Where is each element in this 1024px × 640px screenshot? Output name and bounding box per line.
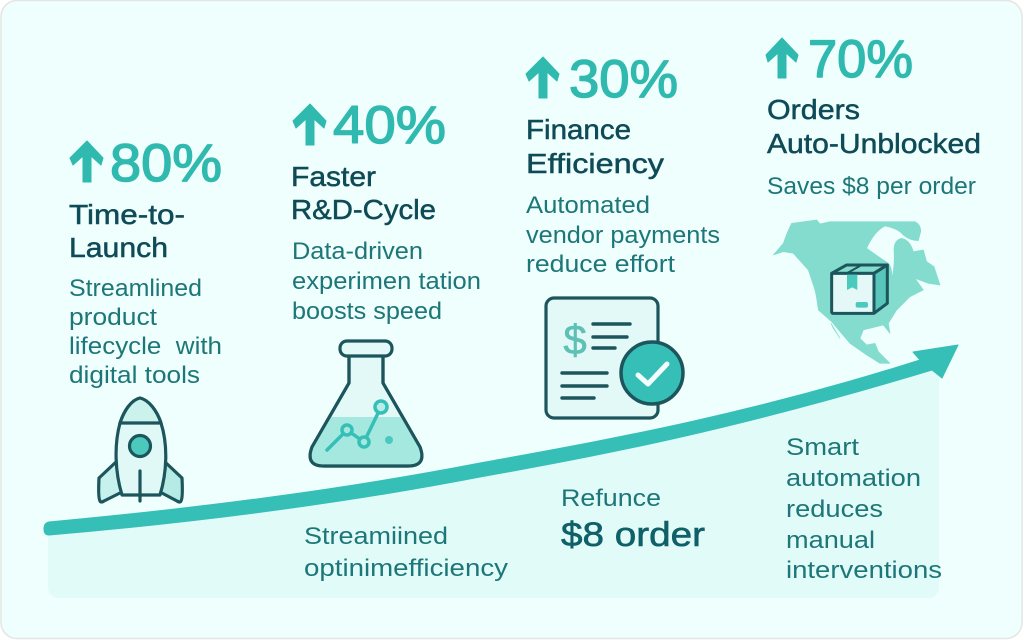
icon: up arrow bbox=[70, 141, 103, 182]
bottom note: refunce $8 order: $8 order bbox=[561, 516, 705, 554]
heading: faster R&D-cycle: Faster bbox=[291, 161, 376, 192]
column 3: finance efficiency bbox=[526, 50, 720, 418]
description: saves per order: Saves $8 per order bbox=[767, 173, 976, 200]
bottom note: smart automation: interventions bbox=[786, 557, 942, 584]
map shape bbox=[773, 220, 940, 363]
bottom note: smart automation: Smart bbox=[786, 434, 859, 461]
heading: time-to-launch: Launch bbox=[69, 232, 168, 263]
icon: flask bbox=[310, 341, 422, 466]
description: vendor payments: vendor payments bbox=[526, 222, 720, 249]
icon: rocket bbox=[99, 398, 182, 502]
metric: 30%: 30% bbox=[569, 50, 678, 109]
description: data-driven experimentation: boosts speed bbox=[292, 298, 442, 325]
growth area under the curve bbox=[48, 370, 939, 598]
heading: orders auto-unblocked: Auto-Unblocked bbox=[767, 128, 981, 159]
icon: invoice with check badge bbox=[546, 298, 683, 418]
bottom note: streamlined efficiency: Streamiined bbox=[304, 523, 448, 550]
column 1: time-to-launch bbox=[69, 134, 222, 502]
heading: finance efficiency: Efficiency bbox=[526, 148, 664, 179]
description: data-driven experimentation: Data-driven bbox=[292, 238, 423, 265]
icon: north america map with parcel bbox=[773, 220, 940, 363]
description: product lifecycle: product bbox=[69, 304, 157, 331]
bottom note: smart automation: reduces bbox=[786, 496, 883, 523]
icon: up arrow bbox=[293, 104, 326, 145]
description: product lifecycle: lifecycle with bbox=[69, 333, 222, 360]
description: product lifecycle: digital tools bbox=[69, 362, 200, 389]
bottom note: streamlined efficiency: optinimefficiency bbox=[304, 555, 508, 582]
description: product lifecycle: Streamlined bbox=[69, 275, 202, 302]
description: vendor payments: Automated bbox=[526, 192, 650, 219]
bottom note: refunce $8 order: Refunce bbox=[561, 485, 661, 512]
column 2: faster R&D cycle bbox=[291, 96, 481, 466]
metric: 80%: 80% bbox=[110, 134, 222, 193]
heading: finance efficiency: Finance bbox=[526, 114, 631, 145]
bottom note: refunce $8 order bbox=[561, 485, 705, 554]
rising trend arrow bbox=[44, 345, 958, 535]
heading: orders auto-unblocked: Orders bbox=[767, 94, 860, 125]
heading: time-to-launch: Time-to- bbox=[69, 199, 185, 230]
icon: up arrow bbox=[766, 38, 798, 78]
icon: invoice with check badge: $ bbox=[563, 316, 587, 363]
bottom note: smart automation: manual bbox=[786, 527, 875, 554]
description: vendor payments: reduce effort bbox=[526, 251, 675, 278]
description: data-driven experimentation: experimen tation bbox=[292, 268, 481, 295]
bottom note: smart automation: automation bbox=[786, 465, 921, 492]
metric: 70%: 70% bbox=[808, 30, 913, 89]
parcel box bbox=[832, 265, 887, 313]
heading: faster R&D-cycle: R&D-Cycle bbox=[291, 194, 436, 225]
metric: 40%: 40% bbox=[333, 96, 446, 155]
column 4: orders auto-unblocked bbox=[766, 30, 981, 363]
icon: up arrow bbox=[526, 57, 559, 98]
